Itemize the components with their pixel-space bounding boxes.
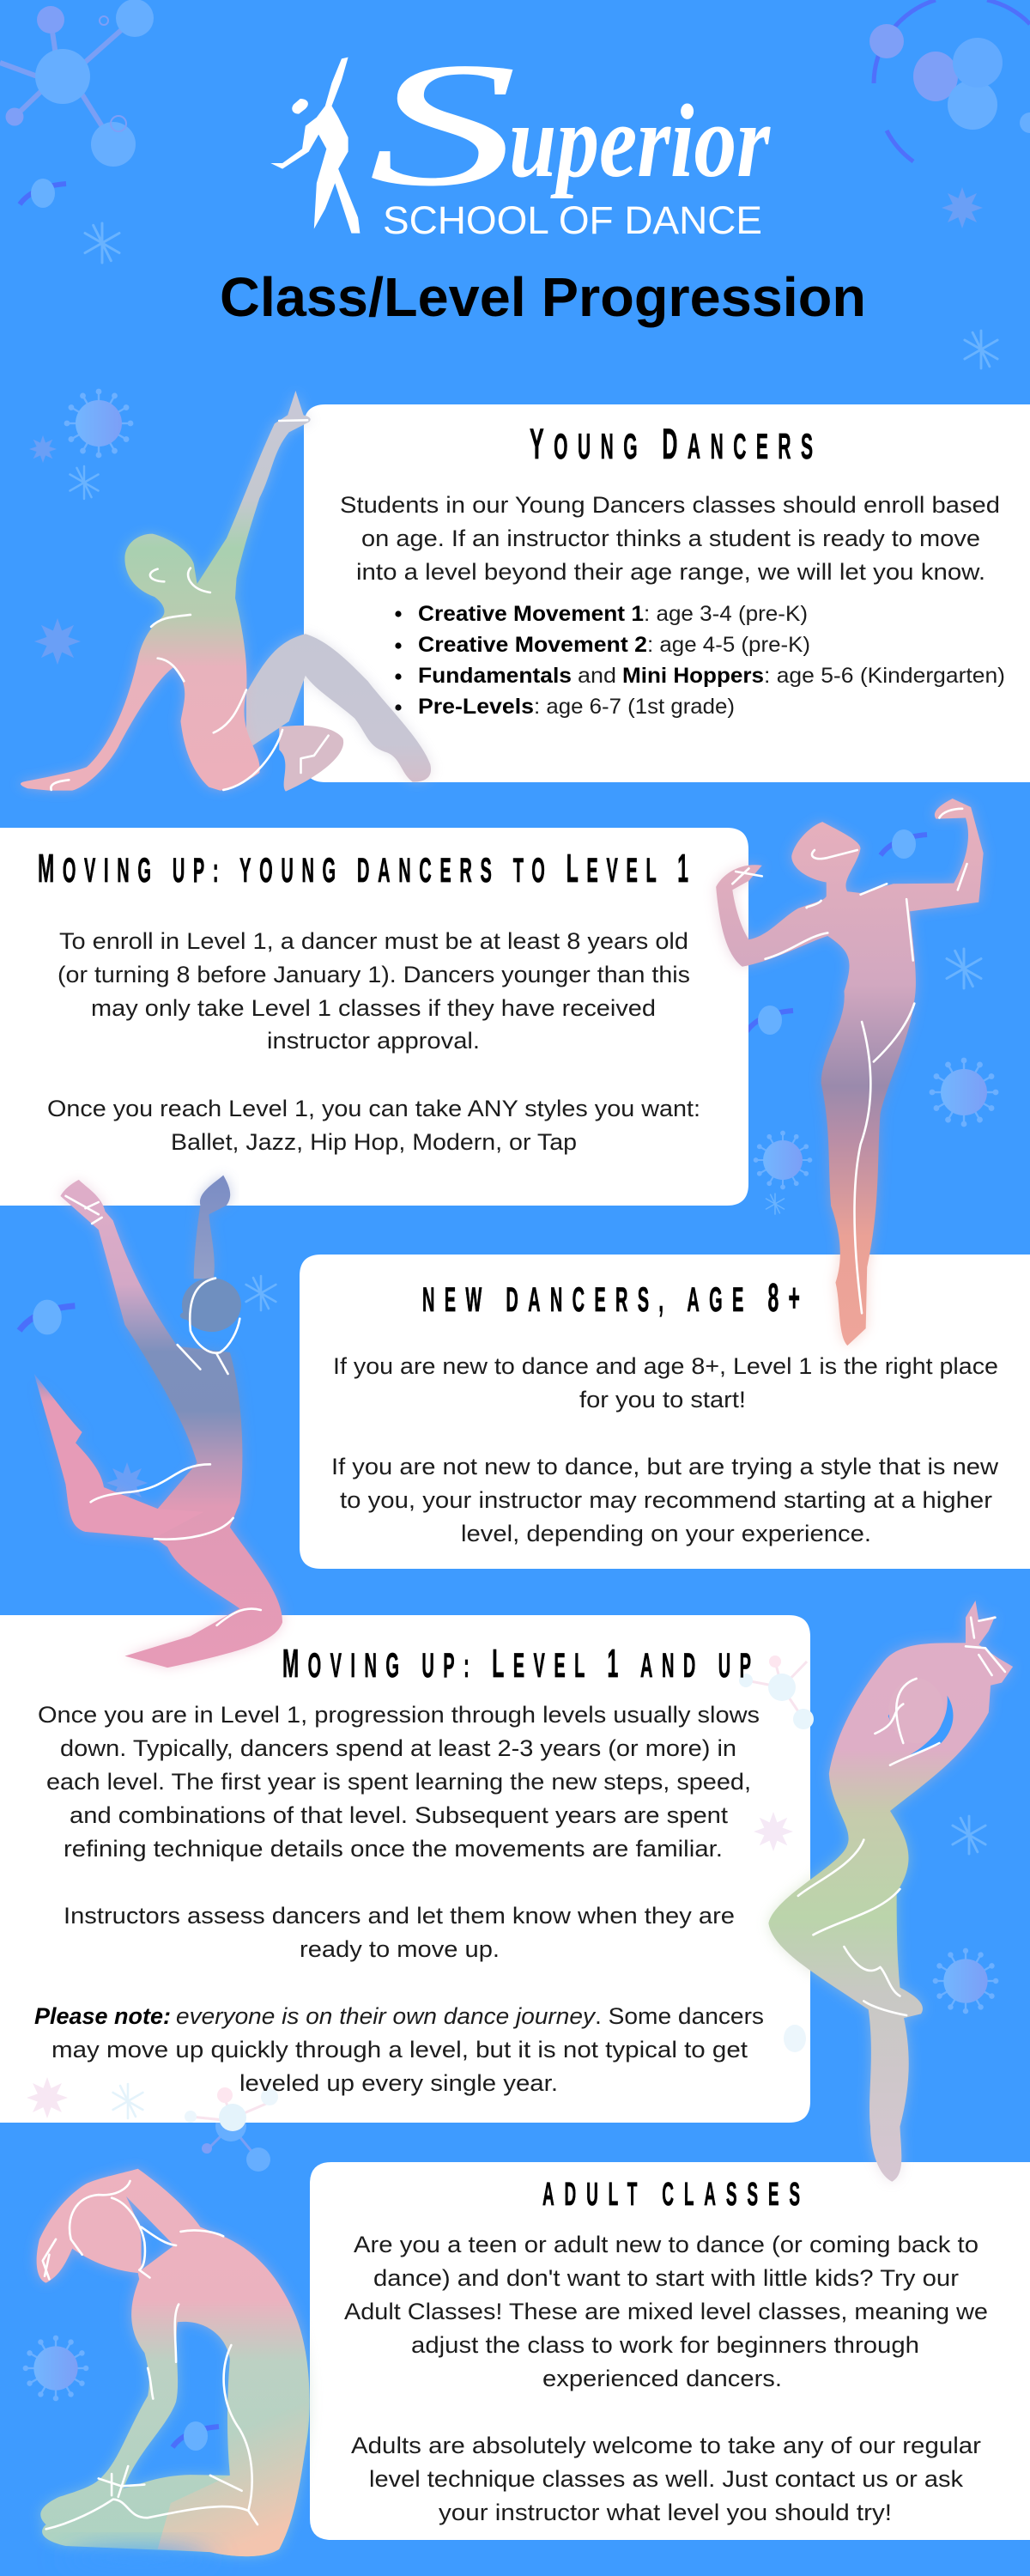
figure: dancer kneeling in backbend (37, 2169, 310, 2567)
heading: MOVING UP: YOUNG DANCERS TO LEVEL 1 (38, 846, 688, 890)
logo dancer silhouette (270, 58, 360, 234)
figure: dancer standing on pointe (716, 799, 984, 1346)
panel: Moving up, Level 1 and up (0, 1615, 814, 2131)
body text (344, 2232, 988, 2525)
body and arms (768, 1601, 1013, 2182)
raised arm (194, 1176, 230, 1279)
body text: dance) and don't want to start with little kids? Try our (373, 2265, 959, 2291)
pale molecule and stars on panel (27, 1656, 814, 2131)
intro text: into a level beyond their age range, we will let you know. (356, 559, 985, 585)
body text: instructor approval. (267, 1028, 480, 1054)
body detail lines (798, 1618, 1005, 2015)
blue slivers beside head (888, 1696, 953, 1755)
body text: for you to start! (579, 1387, 746, 1413)
figure: dancer seated reaching up (21, 391, 431, 792)
bullet list of classes: Mini Hoppers (622, 664, 764, 688)
body, base colour (37, 2169, 310, 2556)
body detail lines (43, 2181, 258, 2529)
body text: may move up quickly through a level, but it is not typical to get (52, 2037, 748, 2063)
body text: level, depending on your experience. (461, 1521, 871, 1546)
bullet list of classes: : age 6-7 (1st grade) (534, 695, 735, 719)
body text (47, 928, 700, 1155)
decoration: ring and circles top right (869, 0, 1030, 161)
body text: leveled up every single year. (239, 2070, 558, 2096)
body text: down. Typically, dancers spend at least 2-3 years (or more) in (60, 1735, 736, 1761)
body text: and combinations of that level. Subsequent years are spent (70, 1802, 729, 1828)
body text (331, 1353, 999, 1546)
body text: Once you reach Level 1, you can take ANY styles you want: (47, 1096, 700, 1121)
bullet list of classes: : age 5-6 (Kindergarten) (764, 664, 1005, 688)
soft blue fade at base (66, 2549, 210, 2567)
panel: Young Dancers (304, 404, 1030, 782)
bullet list of classes (395, 602, 1005, 719)
intro text (340, 492, 1000, 585)
body text: refining technique details once the movements are familiar. (64, 1836, 723, 1862)
bullet list of classes: Creative Movement 1 (418, 602, 644, 626)
intro text: on age. If an instructor thinks a student is ready to move (361, 526, 980, 551)
body text: To enroll in Level 1, a dancer must be at least 8 years old (59, 928, 688, 954)
body text: Please note: (34, 2003, 171, 2029)
body text: may only take Level 1 classes if they have received (91, 995, 656, 1021)
body text: Ballet, Jazz, Hip Hop, Modern, or Tap (171, 1129, 577, 1155)
body detail lines (732, 809, 967, 1313)
body text (34, 1702, 764, 2096)
intro text: Students in our Young Dancers classes should enroll based (340, 492, 1000, 518)
bullet list of classes: : age 4-5 (pre-K) (647, 633, 810, 657)
body text: Are you a teen or adult new to dance (or coming back to (354, 2232, 978, 2257)
bullet list of classes: Fundamentals (418, 664, 572, 688)
body detail lines (51, 420, 329, 790)
body text: everyone is on their own dance journey (176, 2003, 597, 2029)
figure: dancer in retire, arms overhead (768, 1601, 1013, 2182)
body and leg (34, 1180, 282, 1668)
torso and arms (21, 391, 311, 791)
decoration: icons mid right and left (20, 829, 998, 2451)
heading: M OVING UP: L EVEL 1 AND UP (282, 1641, 751, 1686)
decoration: molecule between panels (202, 2111, 270, 2172)
body text: Adults are absolutely welcome to take any of our regular (351, 2433, 981, 2458)
heading: Young Dancers: Y OUNG D ANCERS (530, 421, 813, 468)
logo wordmark: S (369, 26, 517, 222)
bullet list of classes: and (578, 664, 616, 688)
body text: experienced dancers. (542, 2366, 782, 2391)
raised back leg (34, 1374, 203, 1536)
panel: New Dancers, Age 8+ (300, 1255, 1030, 1569)
head (888, 1678, 944, 1743)
bullet list of classes: Creative Movement 2 (418, 633, 647, 657)
body detail lines (66, 1196, 261, 1625)
body text: your instructor what level you should try! (439, 2500, 892, 2525)
panel: Adult Classes (310, 2162, 1030, 2540)
head (182, 1278, 241, 1332)
folded leg (279, 726, 343, 792)
body text: ready to move up. (300, 1936, 500, 1962)
body text: Instructors assess dancers and let them know when they are (64, 1903, 735, 1929)
body and arms (716, 799, 984, 1346)
logo subtitle: SCHOOL OF DANCE (383, 198, 762, 242)
panel: Moving up, Young Dancers to Level 1 (0, 828, 748, 1206)
body text: (or turning 8 before January 1). Dancers younger than this (58, 962, 690, 987)
body text: If you are new to dance and age 8+, Level 1 is the right place (333, 1353, 998, 1379)
title: Class/Level Progression (220, 266, 866, 328)
body text: . Some dancers (595, 2003, 764, 2029)
body text: each level. The first year is spent learning the new steps, speed, (46, 1769, 751, 1795)
heading: ADULT CLASSES (542, 2177, 800, 2213)
body, peach overlay (158, 2386, 309, 2556)
decoration: stars and snowflakes upper area (29, 187, 997, 665)
figure: dancer leaping, arms raised (34, 1176, 282, 1668)
body text: level technique classes as well. Just contact us or ask (369, 2466, 964, 2492)
body text: to you, your instructor may recommend starting at a higher (340, 1487, 992, 1513)
body text: Once you are in Level 1, progression through levels usually slows (38, 1702, 760, 1728)
decoration: molecule top left (0, 0, 154, 208)
body text: If you are not new to dance, but are trying a style that is new (331, 1454, 999, 1479)
heading: NEW DANCERS, AGE 8+ (422, 1275, 800, 1320)
bullet list of classes: : age 3-4 (pre-K) (644, 602, 808, 626)
logo: Superior School of Dance (270, 26, 771, 242)
raised leg (246, 634, 431, 782)
body text: adjust the class to work for beginners through (411, 2332, 919, 2358)
logo: Superior School of Dance: uperior (509, 83, 771, 199)
bullet list of classes: Pre-Levels (418, 695, 534, 719)
body text: Adult Classes! These are mixed level classes, meaning we (344, 2299, 988, 2324)
